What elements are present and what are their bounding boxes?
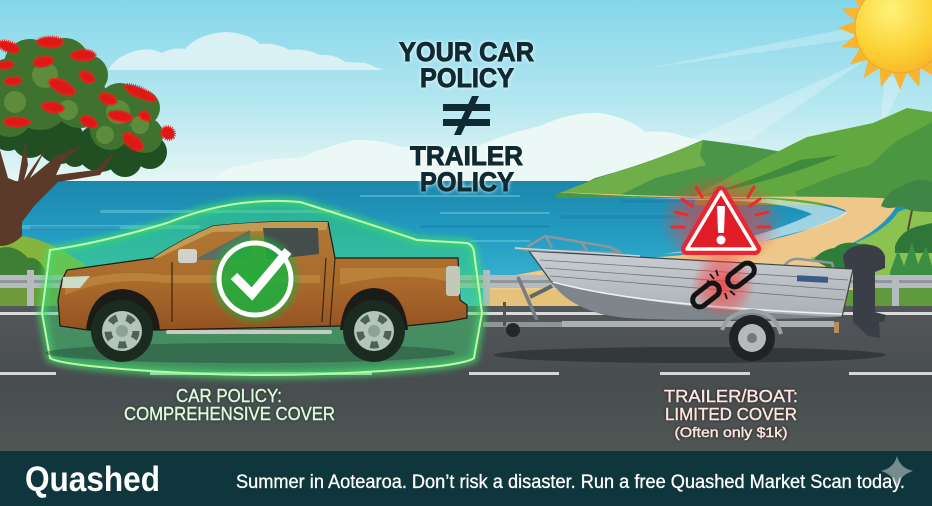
left shore: [0, 236, 85, 275]
right bushes and tree: [812, 180, 932, 276]
title: [399, 37, 534, 197]
pickup truck: [58, 222, 467, 362]
trailer frame: [483, 322, 566, 327]
sand and verge behind guard rail: [0, 254, 932, 308]
label: trailer and boat: (Often only $1k): [674, 424, 788, 440]
shield: car policy: [42, 201, 482, 375]
title: YOUR CAR: [399, 37, 534, 67]
pohutukawa flowers: [0, 37, 177, 154]
trailer and boat: [483, 236, 886, 361]
canopy: [0, 116, 167, 177]
bow rail: [515, 236, 622, 253]
rear wheel: [343, 300, 405, 362]
beach: [558, 192, 900, 258]
title: POLICY: [420, 63, 514, 93]
clouds: [108, 32, 715, 181]
label: trailer and boat: [664, 386, 798, 440]
label: car policy: [124, 386, 335, 424]
mirror and headlight: [178, 249, 197, 263]
lane dashes: [0, 372, 932, 375]
label: car policy: CAR POLICY:: [176, 386, 282, 406]
front wheel: [91, 300, 153, 362]
footer bar: [0, 451, 932, 506]
sun: [838, 0, 932, 90]
outboard motor: [843, 245, 886, 338]
boat shadow: [494, 347, 886, 363]
trailer wheel: [722, 311, 781, 361]
truck body: [58, 222, 467, 330]
sea: [0, 181, 932, 306]
logo: Quashed: [25, 460, 160, 499]
footer message: Summer in Aotearoa. Don’t risk a disaster. Run a free Quashed Market Scan today.: [236, 472, 905, 493]
tail light: [446, 266, 460, 296]
road: [0, 306, 932, 452]
wheel arches: [86, 288, 408, 330]
title: TRAILER: [410, 141, 523, 171]
side step: [166, 330, 332, 334]
icon: broken chain: [690, 253, 757, 317]
boat hull: [529, 251, 853, 318]
hills: [556, 108, 932, 205]
truck shadow: [45, 343, 455, 363]
icon: warning triangle: [659, 174, 783, 270]
title: POLICY: [420, 167, 514, 197]
roof highlight: [153, 222, 328, 258]
label: car policy: COMPREHENSIVE COVER: [124, 404, 335, 424]
sky: [0, 0, 932, 182]
sun rays: [640, 28, 905, 150]
tree: [0, 37, 177, 255]
label: trailer and boat: LIMITED COVER: [665, 404, 797, 424]
label: trailer and boat: TRAILER/BOAT:: [664, 386, 798, 406]
stern rail: [785, 259, 834, 270]
trunk: [0, 140, 115, 255]
windows: [194, 230, 251, 260]
guard rail: [0, 270, 932, 308]
door lines: [172, 258, 335, 326]
icon: sparkle: [881, 456, 913, 487]
door shoulder highlight: [65, 268, 450, 295]
not equal sign: [443, 96, 490, 135]
icon: check mark: [208, 232, 302, 326]
